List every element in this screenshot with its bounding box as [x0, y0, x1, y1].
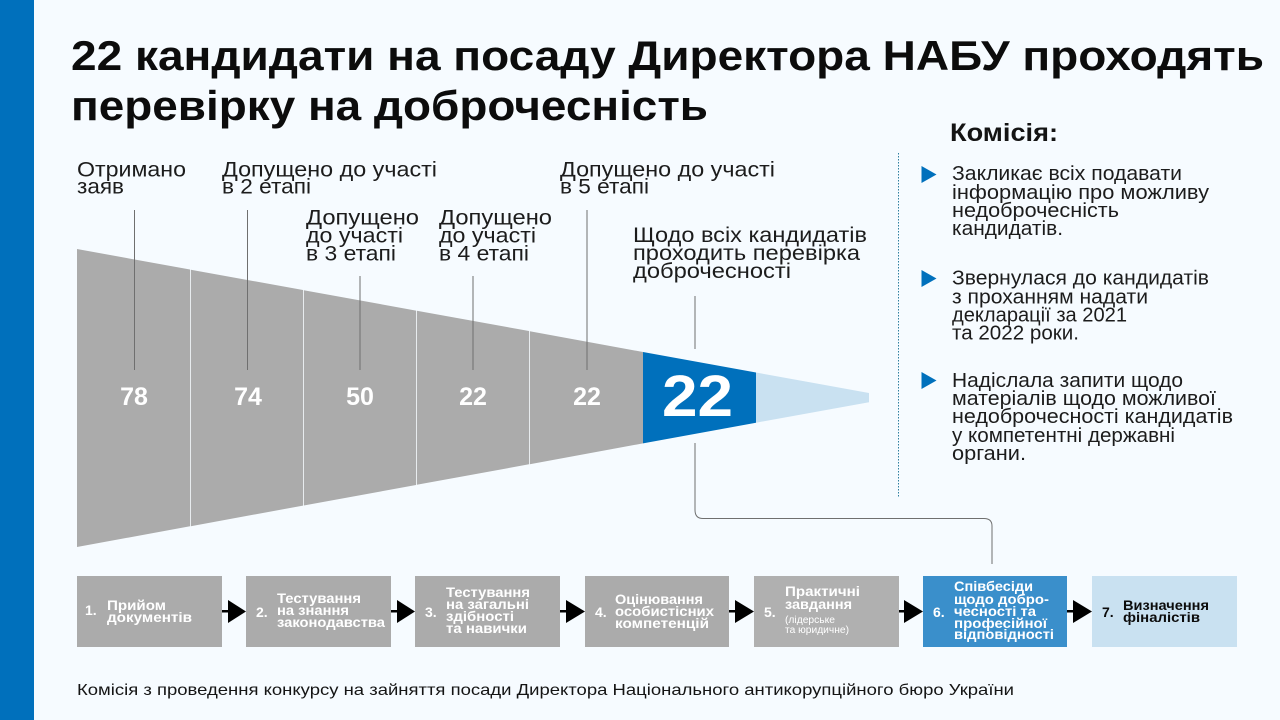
dotted divider — [898, 153, 900, 497]
step 5: 5. — [764, 604, 776, 620]
label: stage 2: в 2 етапі — [222, 176, 311, 198]
bullet text 2: та 2022 роки. — [952, 322, 1079, 344]
label: stage 2 — [222, 158, 437, 198]
bullet icon 3 — [922, 372, 936, 389]
label: stage 3 — [306, 206, 419, 266]
step 4: 4. — [595, 604, 607, 620]
step 6: щодо добро- — [954, 591, 1049, 607]
step 3: на загальні — [446, 596, 529, 612]
bullet text 3: матеріалів щодо можливої — [952, 387, 1216, 410]
bullet text 1: Закликає всіх подавати — [952, 162, 1182, 185]
label: integrity check: Щодо всіх кандидатів — [633, 224, 867, 247]
step 6: професійної — [954, 615, 1048, 631]
bullet text 2: декларації за 2021 — [952, 304, 1127, 326]
step 3: 3. — [425, 604, 437, 620]
step 2: Тестування — [277, 590, 361, 606]
arrow 1 to 2 — [222, 600, 246, 623]
step 2: законодавства — [277, 614, 385, 630]
count 22 stage 5: 22 — [573, 383, 601, 411]
step 6: Співбесіди — [954, 578, 1033, 594]
label: stage 4: в 4 етапі — [439, 242, 529, 266]
step 3 — [415, 576, 560, 647]
label: stage 4: до участі — [439, 224, 536, 248]
label: stage 3: до участі — [306, 224, 403, 248]
bullet text 1: інформацію про можливу — [952, 181, 1210, 204]
funnel segment: 22 stage 4 — [417, 311, 529, 485]
label: integrity check: доброчесності — [633, 260, 791, 283]
step 7: фіналістів — [1123, 609, 1200, 625]
bullet text 1: недоброчесність — [952, 199, 1119, 222]
arrow 3 to 4 — [560, 600, 585, 623]
funnel tip — [756, 372, 869, 423]
step 4: компетенцій — [615, 615, 709, 631]
step 1: Прийом — [107, 597, 166, 613]
bullet text 2: Звернулася до кандидатів — [952, 266, 1209, 290]
step 5 — [754, 576, 899, 647]
panel heading: Комісія: — [950, 119, 1058, 147]
bullet text 3: у компетентні державні — [952, 424, 1175, 447]
funnel segment: 78 — [77, 249, 190, 547]
bullet icon 1 — [922, 166, 936, 183]
connector to step 6 — [695, 443, 992, 564]
bullet text 3: органи. — [952, 442, 1026, 465]
count 22 highlighted: 22 — [662, 364, 733, 429]
label: received applications: заяв — [77, 176, 124, 198]
step 2 — [246, 576, 391, 647]
label: received applications — [77, 158, 186, 198]
bullet text 3: Надіслала запити щодо — [952, 369, 1183, 392]
bullet icon 2 — [922, 270, 936, 287]
left accent bar — [0, 0, 34, 720]
title — [71, 32, 1264, 129]
label: stage 5: в 5 етапі — [560, 176, 649, 198]
arrow 6 to 7 — [1067, 600, 1092, 623]
step 5: завдання — [785, 596, 852, 612]
step 1: 1. — [85, 602, 97, 618]
label: stage 3: в 3 етапі — [306, 242, 396, 266]
funnel segment: highlighted 22 — [643, 352, 756, 443]
funnel chart — [77, 249, 869, 547]
step 3: та навички — [446, 620, 527, 636]
label: stage 3: Допущено — [306, 206, 419, 230]
label: stage 4: Допущено — [439, 206, 552, 230]
label: stage 5 — [560, 158, 775, 198]
count 74: 74 — [234, 383, 262, 411]
step 1 — [77, 576, 222, 647]
step 7: Визначення — [1123, 597, 1209, 613]
step 6: відповідності — [954, 626, 1054, 642]
funnel segment: 22 stage 5 — [530, 331, 643, 464]
bullet text 1 — [952, 162, 1210, 240]
title: 22 кандидати на посаду Директора НАБУ проходять — [71, 32, 1264, 79]
funnel segment: 50 — [304, 290, 416, 506]
label: stage 2: Допущено до участі — [222, 158, 437, 182]
step 2: 2. — [256, 604, 268, 620]
bullet text 2 — [952, 266, 1209, 344]
step 2: на знання — [277, 602, 349, 618]
arrow 2 to 3 — [391, 600, 415, 623]
label: integrity check: проходить перевірка — [633, 242, 860, 265]
bullet text 3: недоброчесності кандидатів — [952, 405, 1233, 428]
step 6: 6. — [933, 604, 945, 620]
step 3: Тестування — [446, 584, 530, 600]
step 7: 7. — [1102, 604, 1114, 620]
step 4: особистісних — [615, 603, 714, 619]
commission panel — [898, 119, 1233, 497]
label: stage 4 — [439, 206, 552, 266]
step 4: Оцінювання — [615, 591, 703, 607]
step 6: чесності та — [954, 603, 1036, 619]
bullet text 2: з проханням надати — [952, 286, 1148, 308]
count 50: 50 — [346, 383, 374, 411]
label: integrity check — [633, 224, 867, 283]
step 6 — [923, 576, 1067, 647]
step 5: Практичні — [785, 583, 860, 599]
label: stage 5: Допущено до участі — [560, 158, 775, 182]
label: received applications: Отримано — [77, 158, 186, 182]
bullet text 3 — [952, 369, 1233, 465]
title: перевірку на доброчесність — [71, 82, 708, 129]
step 4 — [585, 576, 729, 647]
step 5: (лідерське — [785, 615, 835, 626]
bullet text 1: кандидатів. — [952, 217, 1063, 240]
count 22 stage 4: 22 — [459, 383, 487, 411]
arrow 4 to 5 — [729, 600, 754, 623]
step 3: здібності — [446, 608, 514, 624]
step 1: документів — [107, 609, 192, 625]
leader lines — [134, 210, 695, 370]
count 78: 78 — [120, 383, 148, 411]
arrow 5 to 6 — [899, 600, 923, 623]
step 5: та юридичне) — [785, 625, 849, 636]
step 7 — [1092, 576, 1237, 647]
funnel segment: 74 — [191, 270, 303, 526]
footer source: Комісія з проведення конкурсу на зайняття посади Директора Національного антикорупційного бюро України — [77, 682, 1014, 699]
